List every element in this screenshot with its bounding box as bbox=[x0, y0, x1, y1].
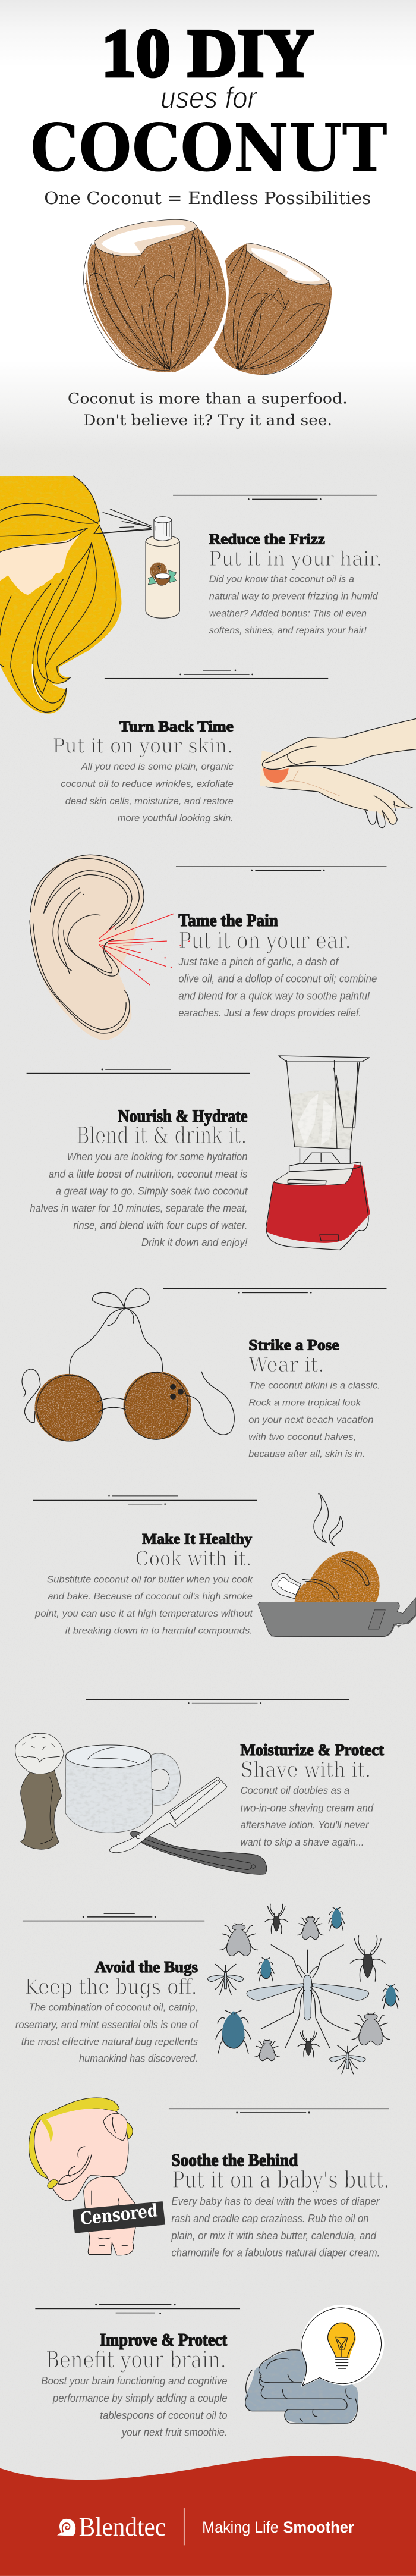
divider bbox=[105, 669, 328, 679]
footer divider bbox=[184, 2508, 185, 2545]
body text: halves in water for 10 minutes, separate the meat, bbox=[30, 1202, 248, 1215]
intro line two: Don't believe it? Try it and see. bbox=[83, 412, 332, 429]
heading: Turn Back Time bbox=[119, 717, 234, 735]
body text: rosemary, and mint essential oils is one of bbox=[15, 2019, 199, 2031]
subheading: Benefit your brain. bbox=[46, 2347, 226, 2373]
illustration: hair bbox=[0, 476, 121, 714]
body text: Drink it down and enjoy! bbox=[141, 1236, 248, 1248]
panel: avoid the bugs bbox=[15, 1904, 399, 2074]
illustration: pan with roast bbox=[258, 1493, 416, 1637]
panel: soothe the behind bbox=[29, 2098, 389, 2259]
heading: Tame the Pain bbox=[178, 911, 278, 930]
illustration: arm and hand bbox=[260, 718, 416, 828]
body text: and a little boost of nutrition, coconut meat is bbox=[49, 1168, 248, 1180]
body text: your next fruit smoothie. bbox=[121, 2426, 228, 2439]
body text: dead skin cells, moisturize, and restore bbox=[65, 796, 234, 807]
subtitle: One Coconut = Endless Possibilities bbox=[44, 188, 371, 208]
body text: chamomile for a fabulous natural diaper cream. bbox=[171, 2246, 380, 2259]
body text: Coconut oil doubles as a bbox=[240, 1785, 349, 1796]
body text: humankind has discovered. bbox=[79, 2053, 198, 2064]
body text: more youthful looking skin. bbox=[118, 812, 234, 823]
body text: The coconut bikini is a classic. bbox=[248, 1380, 380, 1391]
pain rays bbox=[99, 914, 189, 985]
red wave band bbox=[0, 2456, 416, 2576]
spray lines bbox=[93, 509, 152, 534]
censored label: Censored bbox=[80, 2200, 159, 2229]
body text: a great way to go. Simply soak two coconut bbox=[56, 1185, 248, 1197]
body text: olive oil, and a dollop of coconut oil; combine bbox=[178, 972, 377, 985]
body text: natural way to prevent frizzing in humid bbox=[209, 591, 379, 602]
divider bbox=[35, 2304, 240, 2314]
footer bbox=[0, 2456, 416, 2576]
body text: Boost your brain functioning and cognitive bbox=[41, 2374, 228, 2387]
body text: because after all, skin is in. bbox=[248, 1449, 365, 1460]
illustration: thought bubble with light bulb bbox=[302, 2305, 383, 2386]
panel: tame the pain bbox=[30, 855, 386, 1040]
heading: Soothe the Behind bbox=[171, 2151, 298, 2170]
body text: on your next beach vacation bbox=[248, 1414, 374, 1425]
illustration: spray bottle bbox=[146, 517, 179, 618]
title: uses for: uses for bbox=[160, 81, 257, 115]
body text: weather? Added bonus: This oil even bbox=[209, 608, 367, 619]
body text bbox=[34, 1574, 254, 1636]
intro line one: Coconut is more than a superfood. bbox=[68, 390, 348, 407]
illustration: blender bbox=[266, 1056, 370, 1250]
body text: The combination of coconut oil, catnip, bbox=[29, 2001, 198, 2013]
body text bbox=[41, 2374, 228, 2439]
divider bbox=[173, 495, 377, 500]
body text: performance by simply adding a couple bbox=[52, 2392, 228, 2405]
body text bbox=[178, 955, 377, 1019]
illustration: brain bbox=[245, 2350, 358, 2424]
body text: aftershave lotion. You'll never bbox=[240, 1819, 370, 1831]
illustration: coconut bikini bbox=[22, 1288, 234, 1441]
subheading: Put it on your skin. bbox=[52, 735, 233, 758]
divider bbox=[33, 1495, 257, 1505]
subheading: Put it on your ear. bbox=[178, 928, 351, 954]
large mosquito bbox=[247, 1945, 369, 2048]
body text: two-in-one shaving cream and bbox=[240, 1802, 374, 1814]
body text: and blend for a quick way to soothe painful bbox=[178, 990, 370, 1002]
body text: Rock a more tropical look bbox=[248, 1397, 361, 1408]
heading: Make It Healthy bbox=[142, 1530, 252, 1548]
blendtec logo bbox=[57, 2512, 166, 2542]
divider bbox=[27, 1068, 250, 1074]
body text: tablespoons of coconut oil to bbox=[100, 2409, 228, 2421]
body text: All you need is some plain, organic bbox=[81, 761, 234, 772]
panel: improve and protect bbox=[35, 2304, 383, 2439]
divider bbox=[23, 1913, 204, 1921]
illustration: shaving mug bbox=[65, 1745, 181, 1833]
subheading: Put it in your hair. bbox=[209, 547, 382, 570]
body text: Just take a pinch of garlic, a dash of bbox=[178, 955, 339, 968]
body text bbox=[30, 1150, 248, 1248]
body text: plain, or mix it with shea butter, calendula, and bbox=[171, 2229, 377, 2242]
body text: and bake. Because of coconut oil's high smoke bbox=[48, 1591, 253, 1602]
subheading: Blend it & drink it. bbox=[77, 1123, 247, 1149]
illustration: bugs bbox=[207, 1904, 399, 2074]
body text: point, you can use it at high temperatures without bbox=[34, 1608, 254, 1619]
body text: the most effective natural bug repellents bbox=[21, 2036, 198, 2048]
body text bbox=[248, 1380, 380, 1460]
heading: Nourish & Hydrate bbox=[118, 1107, 248, 1126]
right coconut half bbox=[213, 243, 332, 375]
tagline bbox=[202, 2518, 354, 2536]
divider bbox=[163, 1288, 386, 1294]
heading: Moisturize & Protect bbox=[240, 1741, 384, 1759]
body text: When you are looking for some hydration bbox=[67, 1150, 248, 1163]
illustration: baby bbox=[29, 2098, 138, 2255]
subheading: Shave with it. bbox=[240, 1758, 371, 1783]
body text: coconut oil to reduce wrinkles, exfoliate bbox=[61, 779, 234, 789]
body text bbox=[61, 761, 234, 823]
subheading: Wear it. bbox=[248, 1353, 324, 1376]
wordmark: Blendtec bbox=[79, 2512, 166, 2542]
body text: softens, shines, and repairs your hair! bbox=[209, 625, 367, 636]
body text: Substitute coconut oil for butter when you cook bbox=[47, 1574, 253, 1584]
panel: turn back time bbox=[52, 669, 416, 828]
illustration: razor bbox=[109, 1777, 267, 1874]
illustration: shaving brush bbox=[15, 1733, 64, 1849]
subheading: Keep the bugs off. bbox=[25, 1975, 197, 2000]
body text: Did you know that coconut oil is a bbox=[209, 574, 354, 585]
panel: nourish and hydrate bbox=[27, 1056, 370, 1250]
body text: it breaking down in to harmful compounds. bbox=[65, 1626, 253, 1636]
panel: make it healthy bbox=[33, 1493, 416, 1637]
heading: Strike a Pose bbox=[248, 1336, 339, 1354]
body text: rinse, and blend with four cups of water. bbox=[73, 1219, 248, 1232]
body text bbox=[209, 574, 379, 636]
divider bbox=[86, 1699, 349, 1704]
heading: Improve & Protect bbox=[100, 2330, 227, 2349]
body text bbox=[15, 2001, 199, 2064]
heading: Reduce the Frizz bbox=[209, 531, 325, 548]
body text: Every baby has to deal with the woes of diaper bbox=[171, 2195, 380, 2208]
title: 10 DIY: 10 DIY bbox=[102, 15, 314, 91]
body text bbox=[171, 2195, 380, 2259]
illustration: ear bbox=[30, 855, 144, 1040]
divider bbox=[169, 2109, 389, 2113]
body text: want to skip a shave again... bbox=[240, 1836, 364, 1848]
body text: with two coconut halves, bbox=[248, 1432, 356, 1442]
tagline: Smoother bbox=[283, 2518, 354, 2536]
swirl icon bbox=[57, 2519, 75, 2536]
tagline: Making Life bbox=[202, 2518, 279, 2536]
panel: strike a pose bbox=[22, 1288, 386, 1460]
body text: rash and cradle cap craziness. Rub the oil on bbox=[171, 2212, 369, 2224]
heading: Avoid the Bugs bbox=[95, 1958, 198, 1976]
title: COCONUT: COCONUT bbox=[30, 109, 387, 187]
illustration: coconut halves bbox=[84, 219, 332, 375]
body text bbox=[240, 1785, 374, 1848]
left coconut half bbox=[84, 219, 228, 372]
panel: reduce the frizz bbox=[0, 476, 382, 714]
subheading: Cook with it. bbox=[135, 1547, 251, 1570]
header panel bbox=[30, 15, 387, 429]
panel: moisturize and protect bbox=[15, 1699, 384, 1874]
body text: earaches. Just a few drops provides relief. bbox=[178, 1006, 361, 1019]
subheading: Put it on a baby's butt. bbox=[172, 2167, 389, 2194]
divider bbox=[176, 866, 386, 871]
